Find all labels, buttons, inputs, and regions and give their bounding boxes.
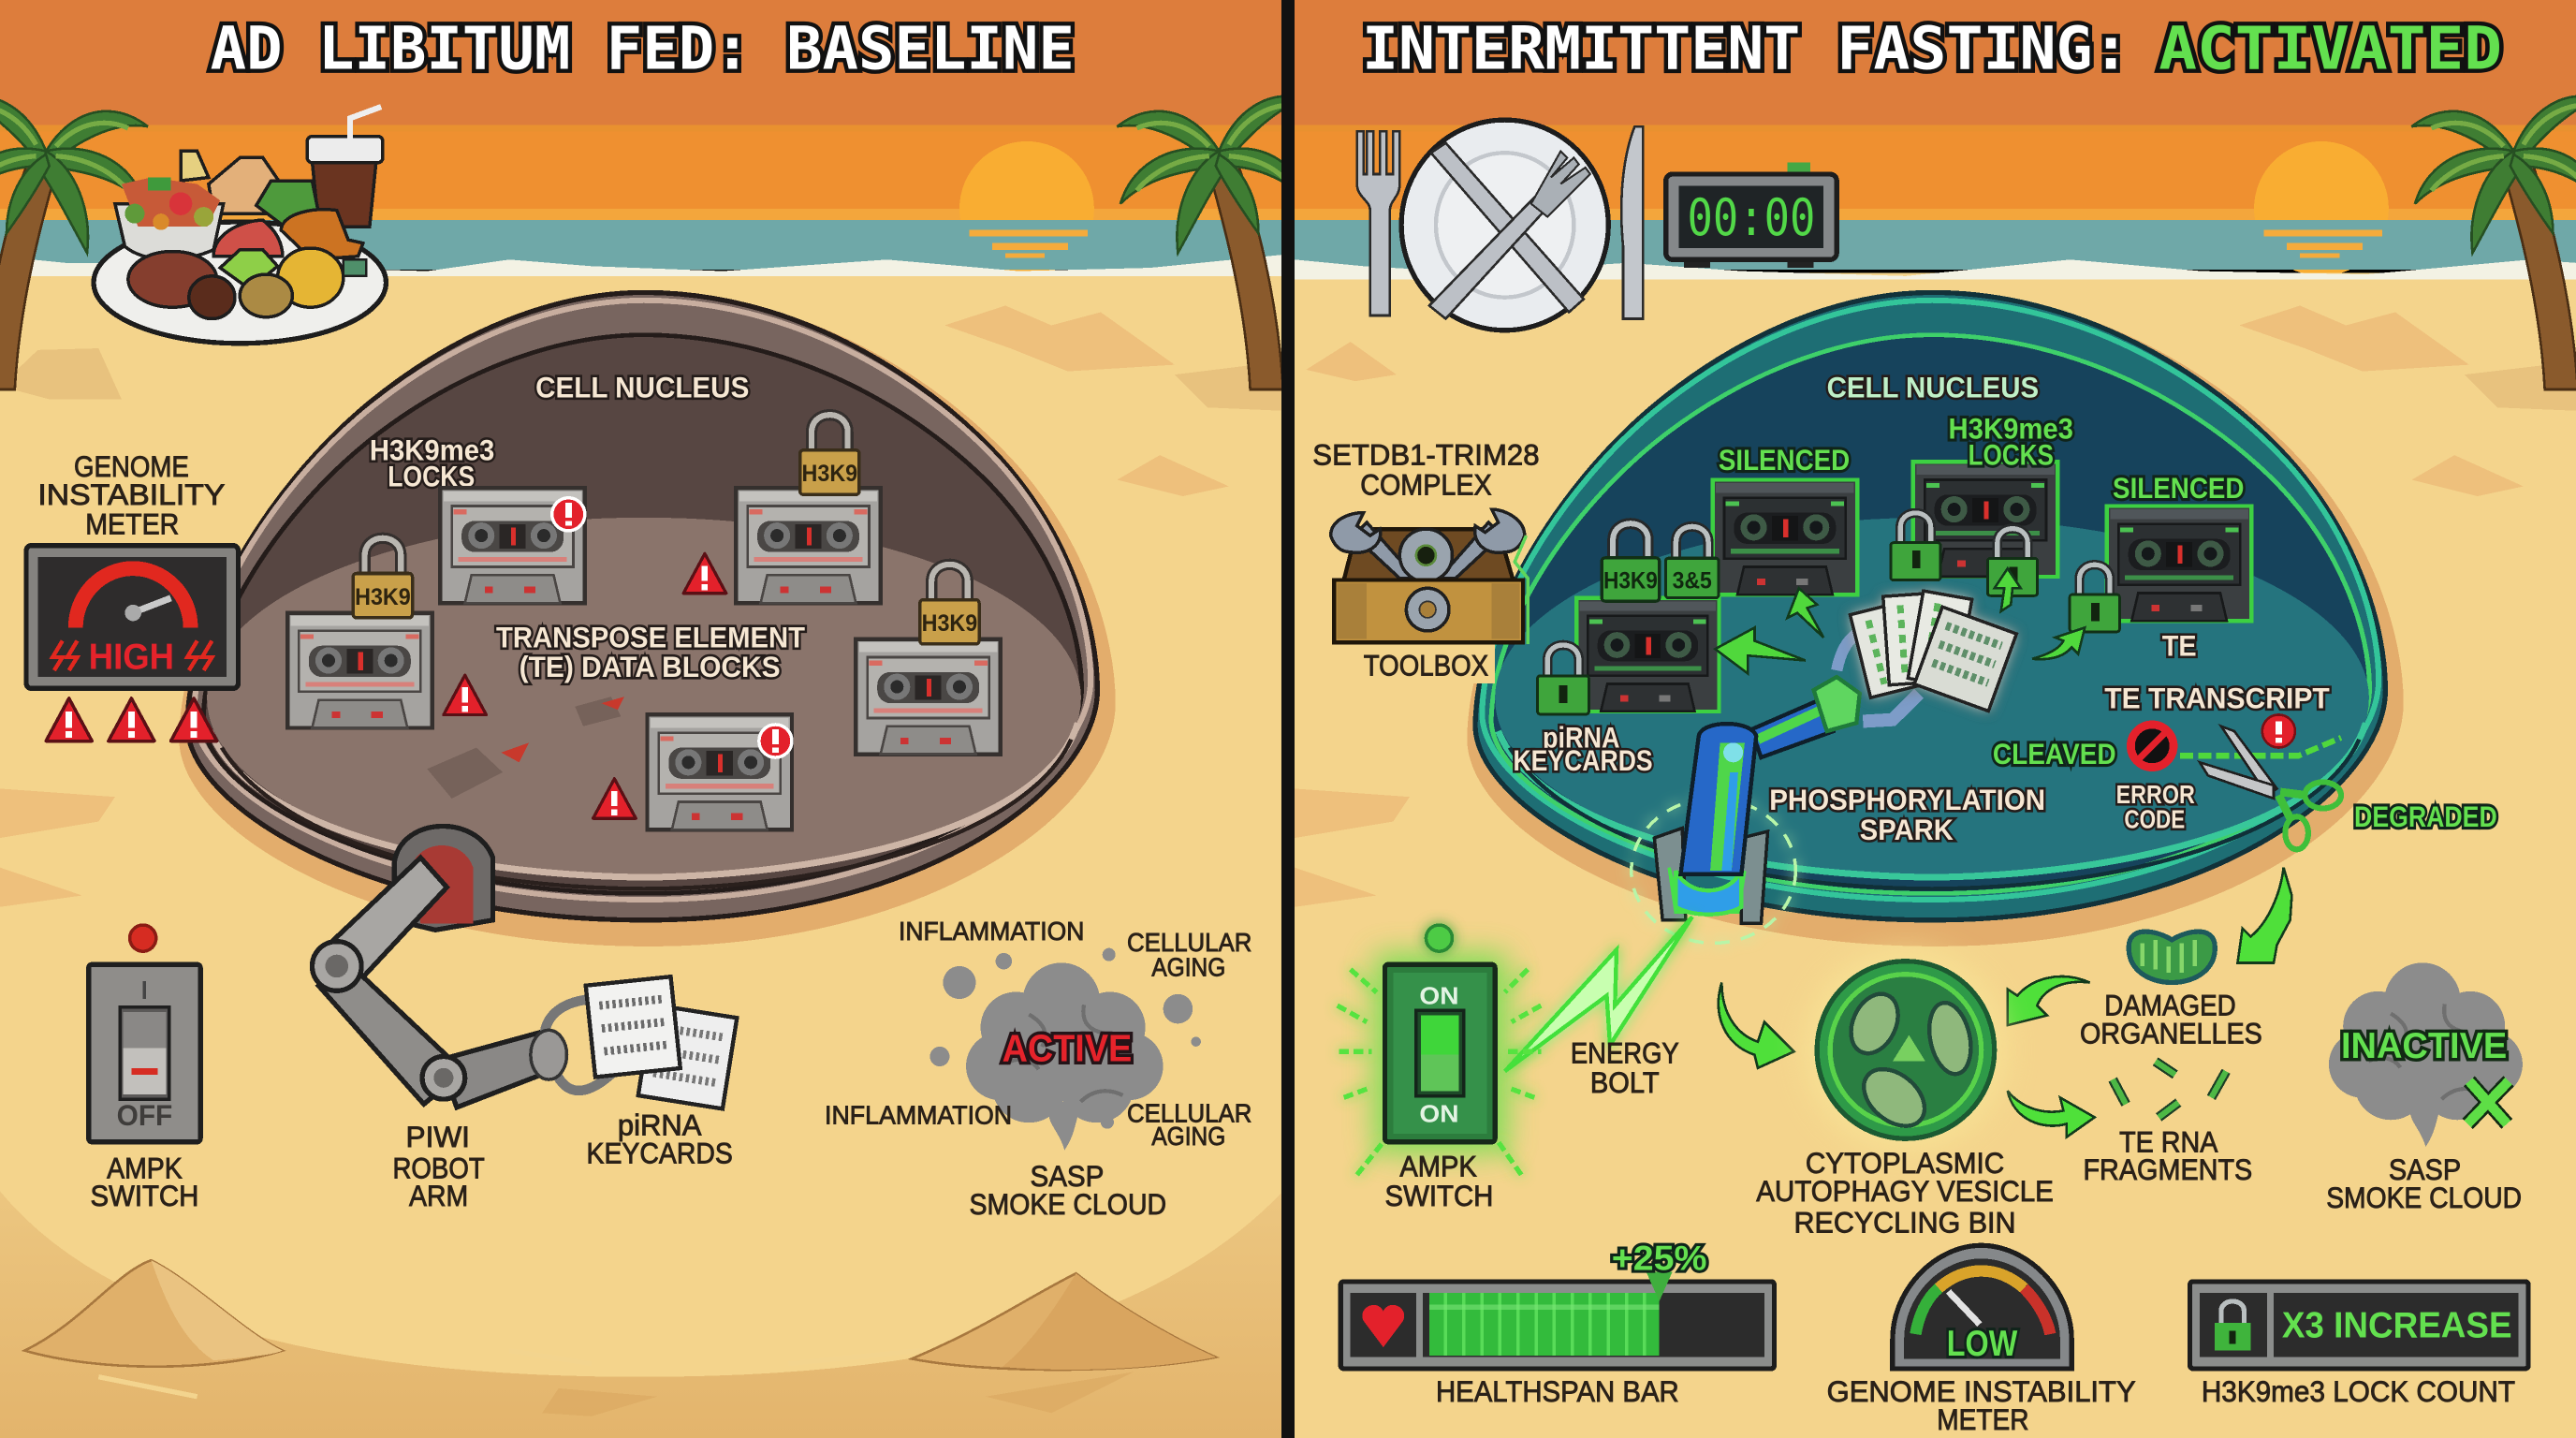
label: transpose element data blocks: (TE) DATA BLOCKS — [520, 650, 781, 683]
label: toolbox: TOOLBOX — [1364, 648, 1488, 682]
label: cytoplasmic autophagy vesicle recycling bin: CYTOPLASMIC — [1806, 1146, 2004, 1180]
icon: right palm tree — [1116, 95, 1281, 391]
label: piRNA keycards — [1513, 721, 1653, 777]
label: TE: TE — [2162, 628, 2197, 662]
icon: SASP smoke cloud active — [929, 948, 1201, 1151]
icon: PIWI robot arm — [312, 826, 618, 1108]
arrow: keycard to upper cassette — [1788, 588, 1823, 638]
cassette: TE block locked left: H3K9 — [355, 585, 411, 610]
label: piRNA keycards: KEYCARDS — [587, 1137, 733, 1170]
title: intermittent fasting activated: ACTIVATED — [2159, 14, 2502, 83]
arrow: vesicle to fragments — [2008, 1091, 2095, 1137]
label: genome instability meter: METER — [1937, 1402, 2029, 1436]
icon: toolbox — [1331, 509, 1528, 644]
label: cytoplasmic autophagy vesicle recycling bin: AUTOPHAGY VESICLE — [1756, 1174, 2054, 1208]
label: inflammation and cellular aging: INFLAMMATION — [899, 917, 1084, 946]
label: SASP smoke cloud: SMOKE CLOUD — [2326, 1181, 2522, 1214]
icon: piRNA keycard fan — [1850, 591, 2016, 712]
arrow: keycard to right lock — [2032, 627, 2085, 659]
label: piRNA keycards: piRNA — [618, 1108, 701, 1142]
chart: H3K9me3 lock count — [2190, 1282, 2528, 1369]
cassette: silenced block upper left — [1713, 479, 1857, 594]
icon: green lock 3x5 — [1665, 526, 1719, 598]
label: AMPK switch: SWITCH — [91, 1179, 198, 1212]
label: phosphorylation spark — [1769, 783, 2045, 846]
label: H3K9me3 locks: H3K9me3 — [1949, 412, 2073, 446]
label: damaged organelles — [2080, 989, 2262, 1049]
icon: SASP smoke cloud active: ACTIVE — [1003, 1027, 1132, 1070]
gauge: genome instability high — [26, 546, 238, 688]
arrow: degraded to damaged organelles — [2237, 868, 2291, 962]
label: genome instability meter — [1827, 1374, 2136, 1436]
panel: intermittent fasting activated — [1295, 0, 2576, 1438]
icon: green lock — [1987, 529, 2038, 595]
label: AMPK switch: SWITCH — [1385, 1179, 1493, 1212]
label: SASP smoke cloud — [2326, 1152, 2522, 1214]
label: degraded: DEGRADED — [2354, 800, 2497, 833]
label: transpose element data blocks — [496, 620, 805, 683]
label: TE RNA fragments — [2083, 1124, 2252, 1186]
label: energy bolt: BOLT — [1590, 1065, 1660, 1099]
icon: autophagy vesicle recycling bin — [1804, 948, 2008, 1152]
cassette: TE block locked right: H3K9 — [922, 611, 977, 637]
cassette: TE block locked top right: H3K9 — [801, 462, 857, 487]
label: silenced: SILENCED — [2113, 471, 2244, 505]
label: cell nucleus: CELL NUCLEUS — [1827, 371, 2039, 404]
label: damaged organelles: DAMAGED — [2104, 989, 2236, 1022]
cassette: locked block centre — [1913, 462, 2057, 577]
chart: healthspan bar — [1340, 1240, 1775, 1369]
gauge: genome instability high: HIGH — [89, 637, 174, 677]
label: inflammation and cellular aging: AGING — [1151, 1122, 1225, 1151]
gauge: genome instability low — [1893, 1245, 2071, 1369]
label: AMPK switch — [1385, 1150, 1493, 1212]
label: inflammation and cellular aging: INFLAMMATION — [825, 1100, 1012, 1129]
label: PIWI robot arm: PIWI — [406, 1120, 470, 1153]
label: cell nucleus: CELL NUCLEUS — [535, 371, 749, 404]
arrow: keycard to centre lock — [1995, 568, 2021, 611]
label: genome instability meter: METER — [85, 506, 179, 540]
label: error code: ERROR — [2116, 780, 2195, 809]
label: H3K9me3 locks: H3K9me3 — [370, 433, 494, 466]
label: piRNA keycards — [588, 1113, 732, 1165]
panel: teal cell nucleus dome — [1475, 292, 2391, 933]
icon: damaged mitochondrion — [2129, 932, 2215, 983]
label: phosphorylation spark: PHOSPHORYLATION — [1769, 783, 2045, 816]
label: inflammation and cellular aging: CELLULAR — [1127, 1099, 1251, 1128]
icon: AMPK switch on: ON — [1419, 1100, 1459, 1128]
chart: H3K9me3 lock count: X3 INCREASE — [2282, 1306, 2512, 1346]
label: setdb1-trim28 complex — [1312, 438, 1540, 501]
title: intermittent fasting activated — [1362, 14, 2502, 83]
label: energy bolt — [1571, 1036, 1679, 1099]
label: inflammation and cellular aging: CELLULAR — [1127, 928, 1251, 957]
label: H3K9me3 locks — [369, 437, 496, 489]
icon: green lock — [1538, 645, 1588, 714]
label: te transcript: TE TRANSCRIPT — [2104, 681, 2330, 714]
background: sunset beach right — [1295, 0, 2576, 1438]
icon: digital timer 00:00 — [1666, 163, 1837, 268]
label: genome instability meter: GENOME — [74, 449, 189, 483]
cassette: TE block with alert — [440, 488, 585, 603]
title: intermittent fasting activated: INTERMITTENT FASTING: — [1362, 14, 2130, 83]
icon: green H3K9 lock — [1602, 523, 1660, 601]
icon: AMPK switch off: OFF — [117, 1098, 172, 1132]
cassette: silenced block right — [2107, 506, 2251, 621]
label: SASP smoke cloud: SASP — [2389, 1152, 2461, 1186]
label: silenced: SILENCED — [1719, 443, 1850, 477]
icon: TE RNA fragments — [2113, 1062, 2226, 1117]
label: damaged organelles: ORGANELLES — [2080, 1016, 2262, 1049]
label: TE RNA fragments: FRAGMENTS — [2083, 1152, 2252, 1186]
label: AMPK switch: AMPK — [1399, 1150, 1477, 1183]
icon: warning triangle — [683, 553, 726, 594]
arrow: organelles into vesicle — [2008, 976, 2089, 1025]
icon: AMPK switch on: ON — [1419, 981, 1459, 1009]
label: inflammation and cellular aging — [825, 917, 1251, 1151]
label: genome instability meter — [40, 455, 225, 535]
label: cytoplasmic autophagy vesicle recycling bin: RECYCLING BIN — [1794, 1205, 2016, 1239]
label: healthspan bar: HEALTHSPAN BAR — [1436, 1374, 1679, 1408]
label: phosphorylation spark: SPARK — [1860, 813, 1954, 846]
label: AMPK switch — [91, 1157, 197, 1207]
label: error code: CODE — [2124, 805, 2185, 834]
label: genome instability meter: INSTABILITY — [37, 477, 225, 511]
icon: green H3K9 lock: H3K9 — [1603, 568, 1658, 594]
background: sunset beach left — [0, 0, 1283, 1438]
label: cytoplasmic autophagy vesicle recycling bin — [1756, 1146, 2054, 1239]
icon: SASP smoke cloud inactive — [2329, 962, 2523, 1147]
label: PIWI robot arm: ROBOT — [392, 1151, 485, 1184]
cassette: TE block locked right — [856, 565, 1001, 755]
label: SASP smoke cloud — [970, 1165, 1166, 1215]
label: TE RNA fragments: TE RNA — [2119, 1124, 2217, 1158]
label: inflammation and cellular aging: AGING — [1151, 952, 1225, 981]
icon: warning triangle — [593, 779, 636, 818]
panel: ad libitum fed baseline — [0, 0, 1308, 1438]
arrow: energy into vesicle — [1719, 983, 1794, 1068]
icon: warning triangle — [444, 675, 487, 715]
icon: SASP smoke cloud inactive: INACTIVE — [2341, 1026, 2507, 1066]
label: setdb1-trim28 complex: COMPLEX — [1360, 467, 1492, 501]
gauge: genome instability low: LOW — [1947, 1324, 2018, 1364]
label: error code — [2116, 780, 2195, 834]
label: AMPK switch: AMPK — [107, 1151, 183, 1184]
cassette: TE block locked top right — [736, 415, 881, 603]
arrow: keycard to lower cassette — [1715, 627, 1806, 674]
icon: scissors cutting transcript — [2180, 726, 2341, 849]
cassette: TE block lower with alert — [648, 714, 792, 829]
chart: healthspan bar: +25% — [1612, 1240, 1707, 1278]
label: transpose element data blocks: TRANSPOSE ELEMENT — [496, 620, 805, 653]
arrow: energy bolt — [1505, 917, 1692, 1071]
label: piRNA keycards: piRNA — [1543, 721, 1620, 755]
icon: warning triangles row — [46, 698, 217, 741]
label: cleaved: CLEAVED — [1993, 737, 2116, 770]
panel divider — [1281, 0, 1295, 1438]
label: PIWI robot arm: ARM — [409, 1179, 468, 1212]
label: genome instability meter: GENOME INSTABILITY — [1827, 1374, 2136, 1408]
label: H3K9me3 locks: LOCKS — [388, 459, 475, 492]
label: H3K9me3 locks: LOCKS — [1969, 438, 2054, 472]
label: PIWI robot arm — [394, 1126, 485, 1206]
cassette: TE block locked left — [287, 538, 432, 727]
panel: grey cell nucleus dome — [187, 292, 1103, 933]
icon: left palm tree — [0, 96, 148, 389]
icon: digital timer 00:00: 00:00 — [1687, 188, 1815, 247]
icon: right panel palm tree — [2411, 96, 2576, 389]
title: ad libitum fed: AD LIBITUM FED: BASELINE — [211, 14, 1075, 83]
icon: alert badge — [2262, 714, 2295, 748]
label: piRNA keycards: KEYCARDS — [1513, 743, 1653, 777]
label: setdb1-trim28 complex: SETDB1-TRIM28 — [1312, 438, 1540, 472]
icon: AMPK switch on — [1338, 925, 1541, 1175]
sand patch behind toolbox label — [1331, 640, 1495, 683]
cassette: locked block lower left — [1576, 598, 1720, 712]
icon: green lock — [2070, 565, 2119, 632]
icon: empty plate with crossed cutlery — [1357, 120, 1643, 330]
icon: loaded food plate with drink — [94, 107, 386, 344]
icon: piRNA keycards — [586, 976, 737, 1108]
icon: AMPK switch off — [89, 925, 200, 1142]
label: H3K9me3 lock count: H3K9me3 LOCK COUNT — [2202, 1374, 2515, 1408]
label: H3K9me3 locks — [1949, 412, 2073, 472]
icon: activated robot arm — [1632, 634, 1919, 943]
label: energy bolt: ENERGY — [1571, 1036, 1679, 1070]
icon: green lock 3x5: 3&5 — [1673, 568, 1712, 594]
icon: error stop sign — [2130, 725, 2174, 768]
label: SASP smoke cloud: SMOKE CLOUD — [970, 1187, 1166, 1221]
icon: green lock — [1891, 513, 1940, 580]
label: SASP smoke cloud: SASP — [1030, 1159, 1104, 1193]
